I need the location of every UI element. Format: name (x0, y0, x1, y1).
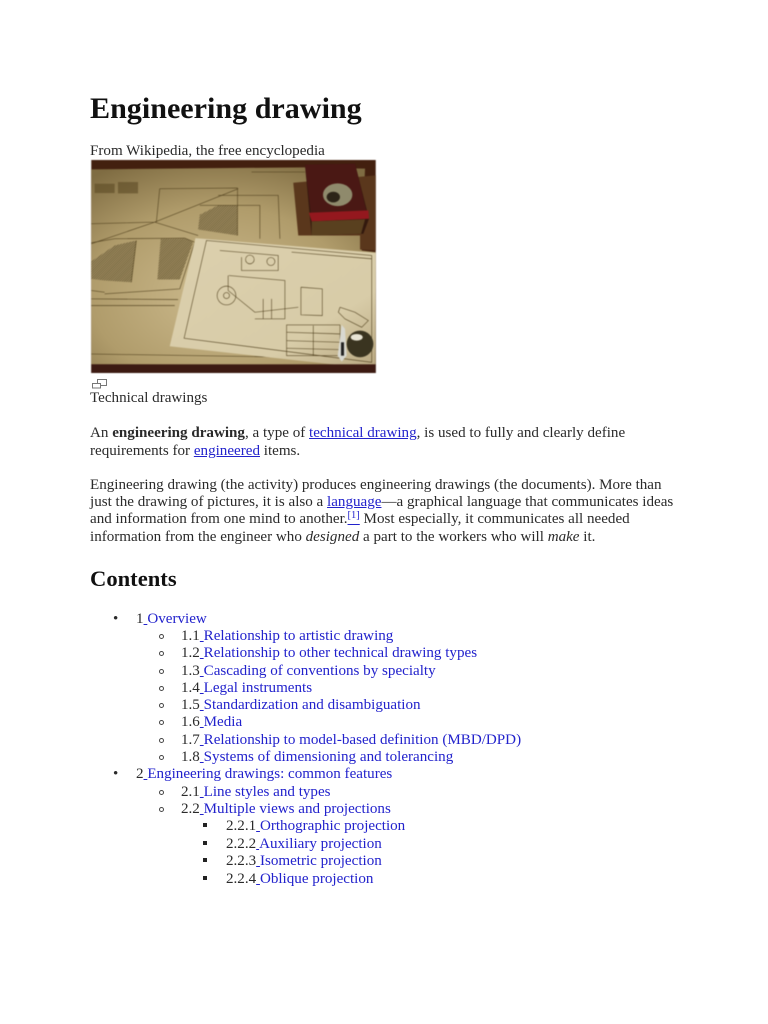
second paragraph: and information from one mind to another.[1] Most especially, it communicates all needed (90, 510, 630, 527)
table of contents: 1.6 Media (181, 714, 242, 730)
table of contents: 1.2 Relationship to other technical drawing types (181, 645, 477, 661)
table of contents: 1.4 Legal instruments (181, 680, 312, 696)
subtitle: From Wikipedia, the free encyclopedia (90, 143, 325, 159)
table of contents: 2.2.2 Auxiliary projection (226, 836, 382, 852)
table of contents: 1.8 Systems of dimensioning and tolerancing (181, 749, 453, 765)
table of contents: 2 Engineering drawings: common features (136, 766, 392, 782)
table of contents: 1.1 Relationship to artistic drawing (181, 628, 393, 644)
table of contents: 1.7 Relationship to model-based definition (MBD/DPD) (181, 732, 521, 748)
table of contents: • (113, 766, 118, 782)
second paragraph (90, 477, 673, 545)
table of contents: 2.2 Multiple views and projections (181, 801, 391, 817)
intro paragraph (90, 425, 625, 459)
title: Engineering drawing (90, 91, 362, 125)
table of contents: 2.2.4 Oblique projection (226, 871, 373, 887)
intro paragraph: An engineering drawing, a type of technical drawing, is used to fully and clearly define (90, 425, 625, 441)
table of contents: • (113, 611, 118, 627)
table of contents: 2.2.3 Isometric projection (226, 853, 382, 869)
table of contents (113, 611, 521, 887)
intro paragraph: requirements for engineered items. (90, 443, 300, 459)
photo: technical drawings on a desk (90, 159, 377, 374)
table of contents: 2.1 Line styles and types (181, 784, 331, 800)
second paragraph: Engineering drawing (the activity) produces engineering drawings (the documents). More than (90, 477, 662, 493)
icon: enlarge (92, 379, 107, 388)
table of contents: 1.5 Standardization and disambiguation (181, 697, 421, 713)
table of contents: 2.2.1 Orthographic projection (226, 818, 405, 834)
second paragraph: information from the engineer who designed a part to the workers who will make it. (90, 529, 595, 545)
contents heading: Contents (90, 566, 177, 591)
image caption: Technical drawings (90, 390, 207, 406)
table of contents: 1.3 Cascading of conventions by specialty (181, 663, 436, 679)
second paragraph: just the drawing of pictures, it is also a language—a graphical language that communicates ideas (90, 494, 673, 510)
table of contents: 1 Overview (136, 611, 207, 627)
